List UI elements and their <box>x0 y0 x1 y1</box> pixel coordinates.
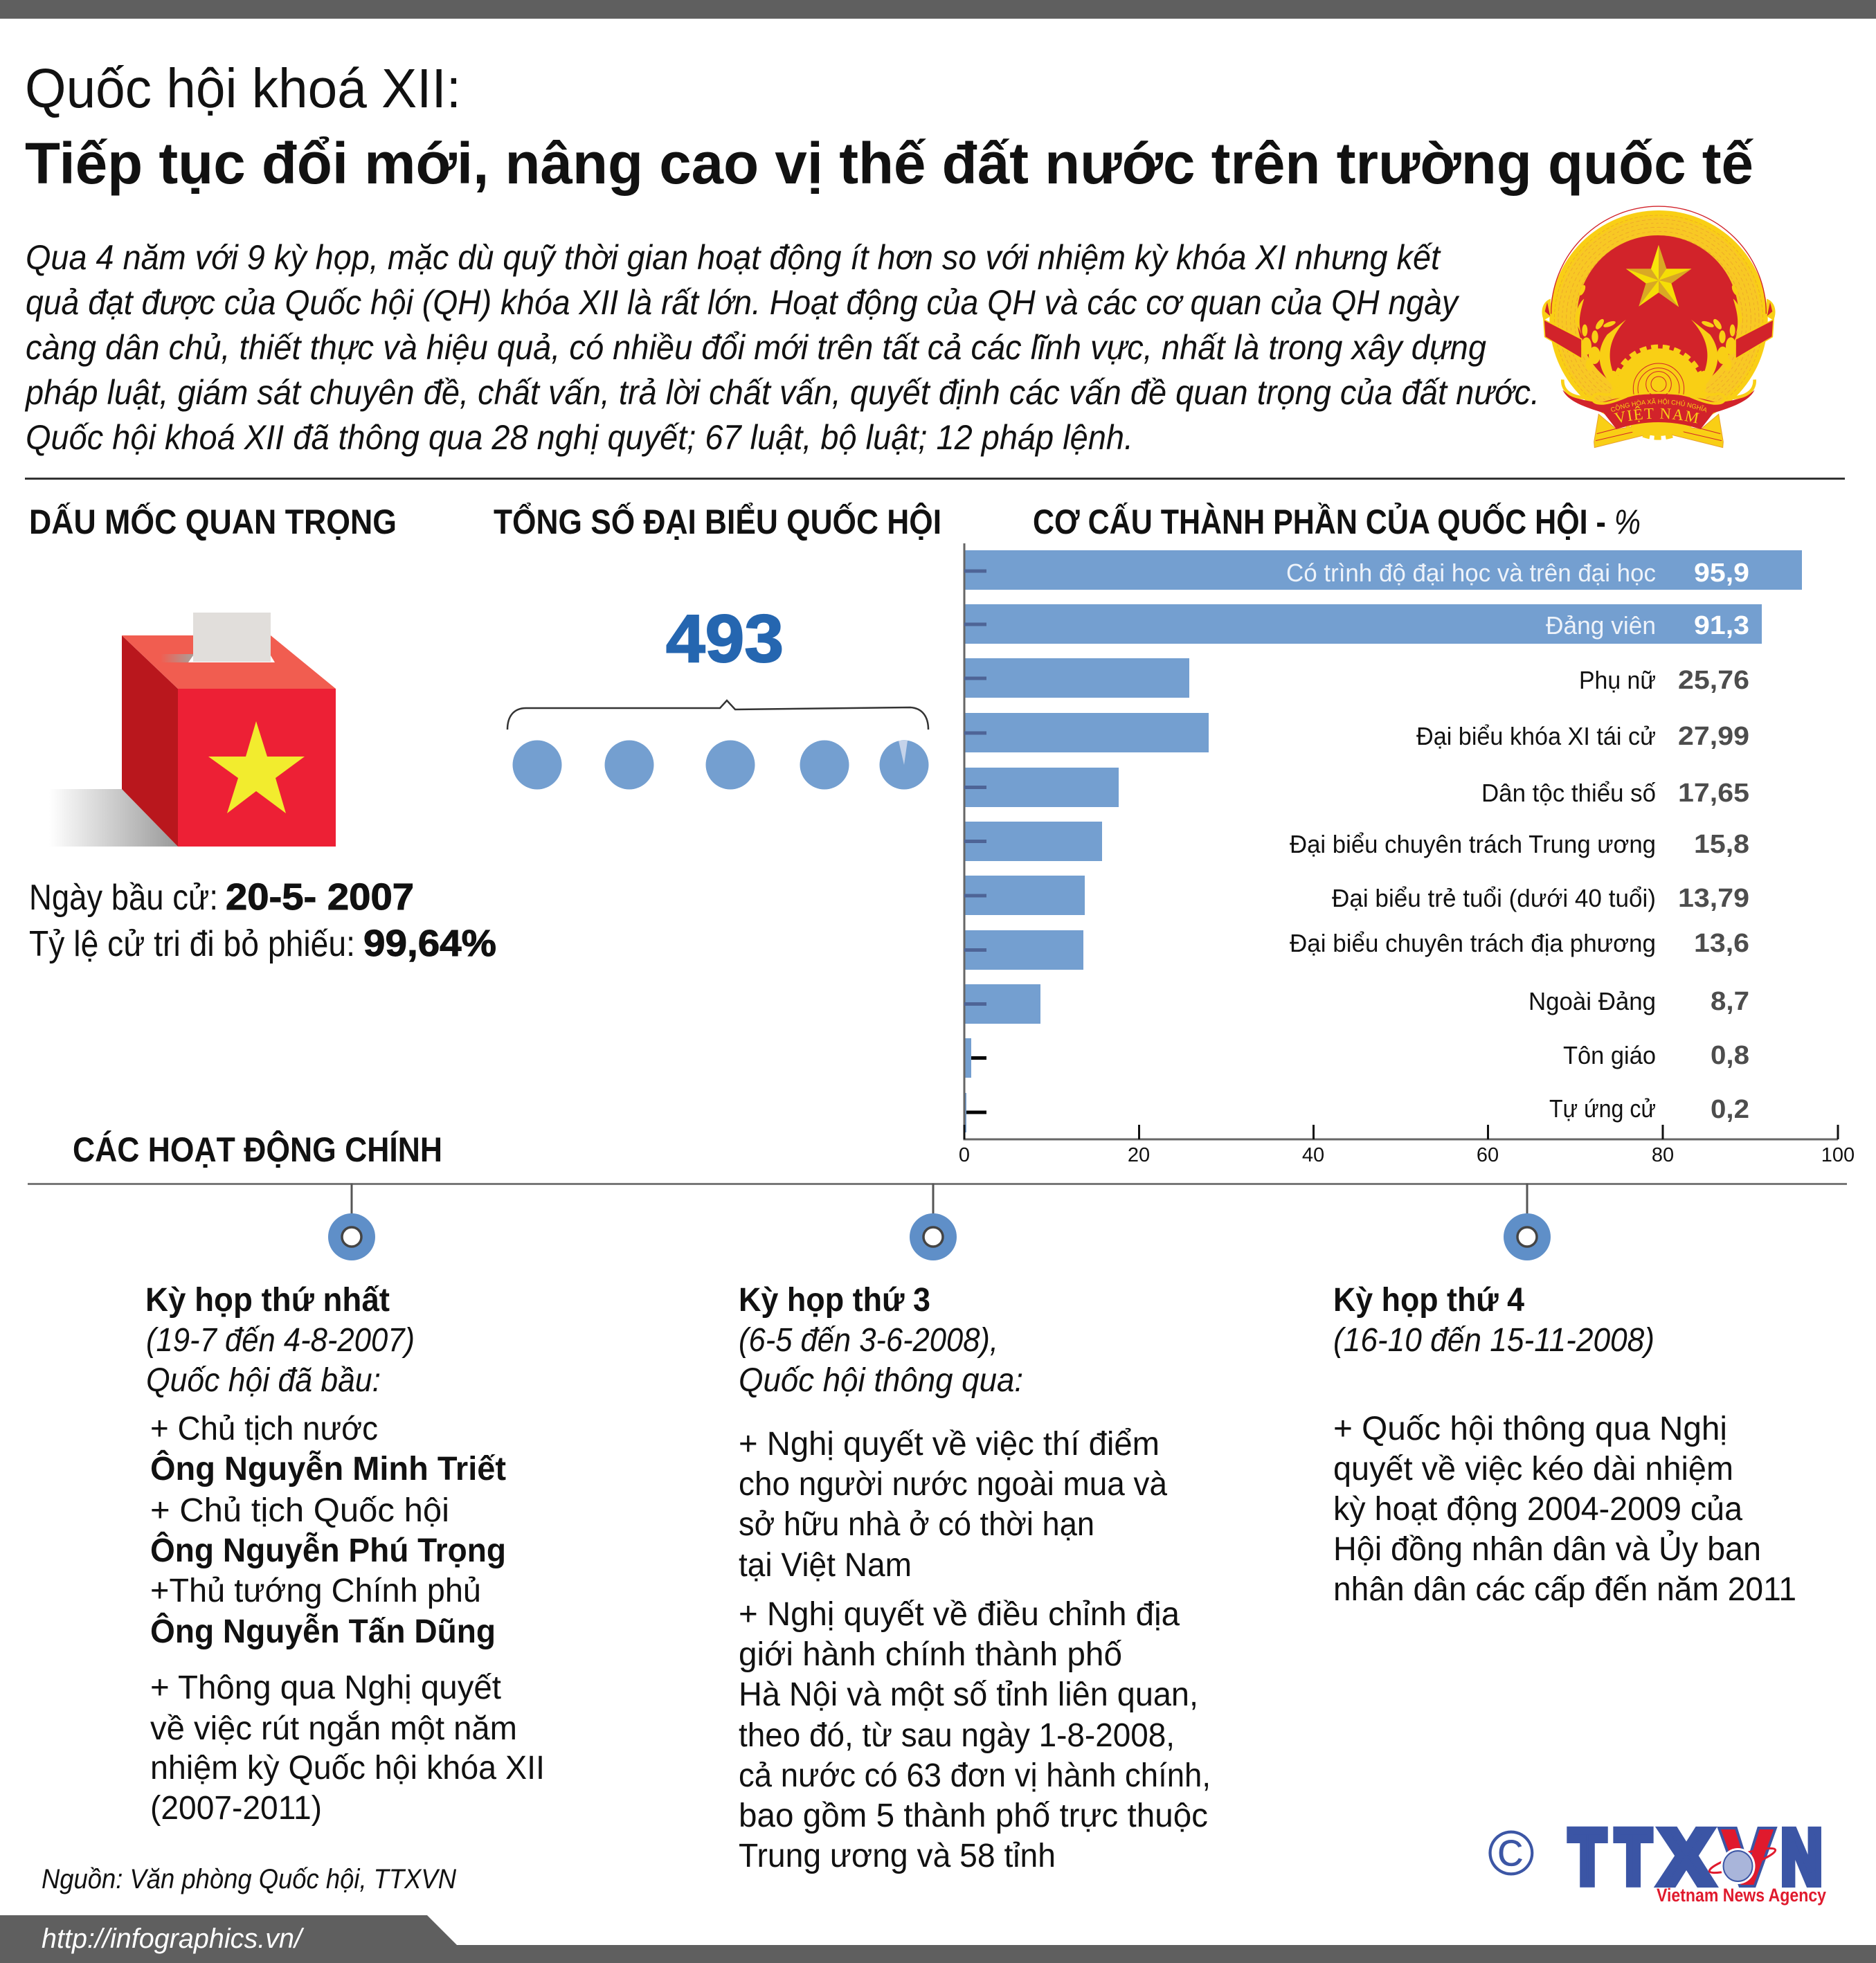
category labels: Đại biểu chuyên trách địa phương <box>1290 929 1656 957</box>
intro paragraph: quả đạt được của Quốc hội (QH) khóa XII là rất lớn. Hoạt động của QH và các cơ quan của QH ngày <box>26 283 1460 322</box>
footer bar <box>0 1915 1876 1963</box>
session heading: Kỳ họp thứ 4 <box>1333 1282 1524 1319</box>
resolution on housing: sở hữu nhà ở có thời hạn <box>739 1506 1094 1543</box>
icon: national emblem of Vietnam: CỘNG HÒA XÃ HỘI CHỦ NGHĨA <box>1611 398 1706 413</box>
resolution on boundaries: Trung ương và 58 tỉnh <box>739 1838 1056 1874</box>
timeline <box>28 1183 1847 1260</box>
intro paragraph: Quốc hội khoá XII đã thông qua 28 nghị quyết; 67 luật, bộ luật; 12 pháp lệnh. <box>26 418 1133 457</box>
elected officials: Ông Nguyễn Phú Trọng <box>150 1531 506 1569</box>
axis labels: 0 <box>959 1144 970 1166</box>
title line 2: Tiếp tục đổi mới, nâng cao vị thế đất nước trên trường quốc tế <box>25 131 1753 196</box>
values: 13,79 <box>1678 884 1749 913</box>
elected officials: + Chủ tịch Quốc hội <box>150 1492 449 1529</box>
category labels: Đại biểu trẻ tuổi (dưới 40 tuổi) <box>1332 884 1656 912</box>
intro paragraph <box>24 238 1540 457</box>
session heading: Kỳ họp thứ 3 <box>739 1282 930 1319</box>
elected officials: Ông Nguyễn Tấn Dũng <box>150 1612 496 1650</box>
values: 0,2 <box>1711 1095 1749 1124</box>
session heading: Kỳ họp thứ nhất <box>145 1282 390 1319</box>
resolution on boundaries: theo đó, từ sau ngày 1-8-2008, <box>739 1717 1175 1754</box>
footer url: http://infographics.vn/ <box>42 1924 305 1954</box>
election facts <box>29 876 496 964</box>
logo: TTXVN: T <box>1616 1815 1651 1900</box>
resolution on housing <box>739 1426 1167 1584</box>
resolution on housing: + Nghị quyết về việc thí điểm <box>739 1426 1160 1463</box>
intro paragraph: Qua 4 năm với 9 kỳ họp, mặc dù quỹ thời gian hoạt động ít hơn so với nhiệm kỳ khóa XI nhưng kết <box>26 238 1441 277</box>
resolution: (2007-2011) <box>150 1790 322 1827</box>
axis labels: 60 <box>1477 1144 1499 1166</box>
logo: TTXVN <box>1569 1815 1826 1906</box>
icon: five deputy dots <box>512 741 929 789</box>
resolution on boundaries: bao gồm 5 thành phố trực thuộc <box>739 1798 1208 1834</box>
values: 91,3 <box>1694 611 1749 640</box>
values: 25,76 <box>1678 666 1749 695</box>
values: 27,99 <box>1678 722 1749 751</box>
resolution: về việc rút ngắn một năm <box>150 1710 517 1747</box>
logo: TTXVN: V <box>1722 1815 1772 1900</box>
intro paragraph: càng dân chủ, thiết thực và hiệu quả, có nhiều đổi mới trên tất cả các lĩnh vực, nhất là trong xây dựng <box>26 328 1486 367</box>
source: Nguồn: Văn phòng Quốc hội, TTXVN <box>42 1864 456 1894</box>
session date: (6-5 đến 3-6-2008), <box>739 1322 998 1359</box>
values: 15,8 <box>1694 830 1749 859</box>
logo: TTXVN: N <box>1781 1815 1822 1900</box>
axis labels <box>959 1144 1855 1166</box>
session intro: Quốc hội đã bầu: <box>146 1362 381 1399</box>
session intro: Quốc hội thông qua: <box>739 1362 1023 1399</box>
title line 1: Quốc hội khoá XII: <box>25 57 461 119</box>
session date: (16-10 đến 15-11-2008) <box>1333 1322 1654 1359</box>
election date value: 20-5- 2007 <box>226 876 414 918</box>
session body: + Quốc hội thông qua Nghị <box>1333 1411 1727 1447</box>
category labels: Đại biểu khóa XI tái cử <box>1416 722 1656 750</box>
resolution on boundaries: giới hành chính thành phố <box>739 1636 1122 1673</box>
top bar <box>0 0 1876 19</box>
heading: total deputies: TỔNG SỐ ĐẠI BIỂU QUỐC HỘI <box>494 502 941 541</box>
category labels: Tôn giáo <box>1563 1041 1656 1069</box>
values: 17,65 <box>1678 779 1749 808</box>
panel: session 3 <box>739 1282 1211 1874</box>
icon: national emblem of Vietnam <box>1542 206 1775 449</box>
session body <box>1333 1411 1796 1608</box>
brace <box>507 700 928 730</box>
category labels: Phụ nữ <box>1579 666 1656 694</box>
values: 13,6 <box>1694 929 1749 958</box>
marker 3 <box>1504 1213 1551 1260</box>
icon: ballot box <box>49 613 336 847</box>
resolution on boundaries: + Nghị quyết về điều chỉnh địa <box>739 1596 1180 1633</box>
session body: Hội đồng nhân dân và Ủy ban <box>1333 1530 1761 1568</box>
axis labels: 100 <box>1821 1144 1855 1166</box>
session body: nhân dân các cấp đến năm 2011 <box>1333 1571 1796 1608</box>
axis labels: 20 <box>1128 1144 1150 1166</box>
resolution <box>150 1670 545 1827</box>
category labels: Ngoài Đảng <box>1528 987 1656 1015</box>
resolution: nhiệm kỳ Quốc hội khóa XII <box>150 1750 545 1786</box>
turnout value: 99,64% <box>363 923 496 964</box>
resolution on boundaries <box>739 1596 1211 1874</box>
session body: quyết về việc kéo dài nhiệm <box>1333 1451 1733 1487</box>
resolution on housing: tại Việt Nam <box>739 1547 912 1584</box>
intro paragraph: pháp luật, giám sát chuyên đề, chất vấn, trả lời chất vấn, quyết định các vấn đề quan trọng của đất nước. <box>24 373 1540 412</box>
marker 2 <box>910 1213 957 1260</box>
icon: copyright: © <box>1488 1818 1535 1889</box>
logo caption: Vietnam News Agency <box>1657 1885 1826 1906</box>
logo: TTXVN: V <box>1722 1815 1772 1900</box>
big number 493: 493 <box>666 601 784 676</box>
category labels: Dân tộc thiểu số <box>1481 779 1656 807</box>
category labels: Có trình độ đại học và trên đại học <box>1286 559 1656 587</box>
values: 0,8 <box>1711 1041 1749 1070</box>
axis labels: 40 <box>1302 1144 1324 1166</box>
resolution on boundaries: cả nước có 63 đơn vị hành chính, <box>739 1757 1211 1794</box>
category labels: Đại biểu chuyên trách Trung ương <box>1290 830 1656 858</box>
heading: main activities: CÁC HOẠT ĐỘNG CHÍNH <box>73 1130 442 1169</box>
heading: milestones: DẤU MỐC QUAN TRỌNG <box>29 502 397 541</box>
icon: national emblem of Vietnam: VIỆT NAM <box>1614 406 1699 424</box>
title <box>25 57 1753 196</box>
marker 1 <box>328 1213 375 1260</box>
values: 8,7 <box>1711 987 1749 1016</box>
session body: kỳ hoạt động 2004-2009 của <box>1333 1491 1742 1528</box>
session date: (19-7 đến 4-8-2007) <box>146 1322 415 1359</box>
elected officials: +Thủ tướng Chính phủ <box>150 1573 481 1609</box>
category labels: Tự ứng cử <box>1549 1094 1656 1123</box>
elected officials <box>150 1411 506 1650</box>
bars <box>964 550 1802 1132</box>
values <box>1678 559 1749 1124</box>
election date: Ngày bầu cử: <box>29 878 218 918</box>
logo: TTXVN: T <box>1569 1815 1605 1900</box>
elected officials: Ông Nguyễn Minh Triết <box>150 1449 506 1487</box>
panel: session 4 <box>1333 1282 1796 1608</box>
resolution on housing: cho người nước ngoài mua và <box>739 1466 1167 1503</box>
resolution: + Thông qua Nghị quyết <box>150 1670 501 1706</box>
divider <box>25 478 1845 480</box>
logo: TTXVN: X <box>1661 1815 1712 1900</box>
values: 95,9 <box>1694 559 1749 588</box>
bar chart: composition of the National Assembly <box>959 543 1855 1166</box>
resolution on boundaries: Hà Nội và một số tỉnh liên quan, <box>739 1676 1198 1713</box>
elected officials: + Chủ tịch nước <box>150 1411 378 1447</box>
turnout: Tỷ lệ cử tri đi bỏ phiếu: <box>29 924 355 964</box>
panel: session 1 <box>145 1282 545 1827</box>
axis labels: 80 <box>1652 1144 1674 1166</box>
category labels <box>1286 559 1656 1123</box>
category labels: Đảng viên <box>1546 611 1656 640</box>
heading: composition: CƠ CẤU THÀNH PHẦN CỦA QUỐC HỘI - % <box>1033 502 1641 541</box>
